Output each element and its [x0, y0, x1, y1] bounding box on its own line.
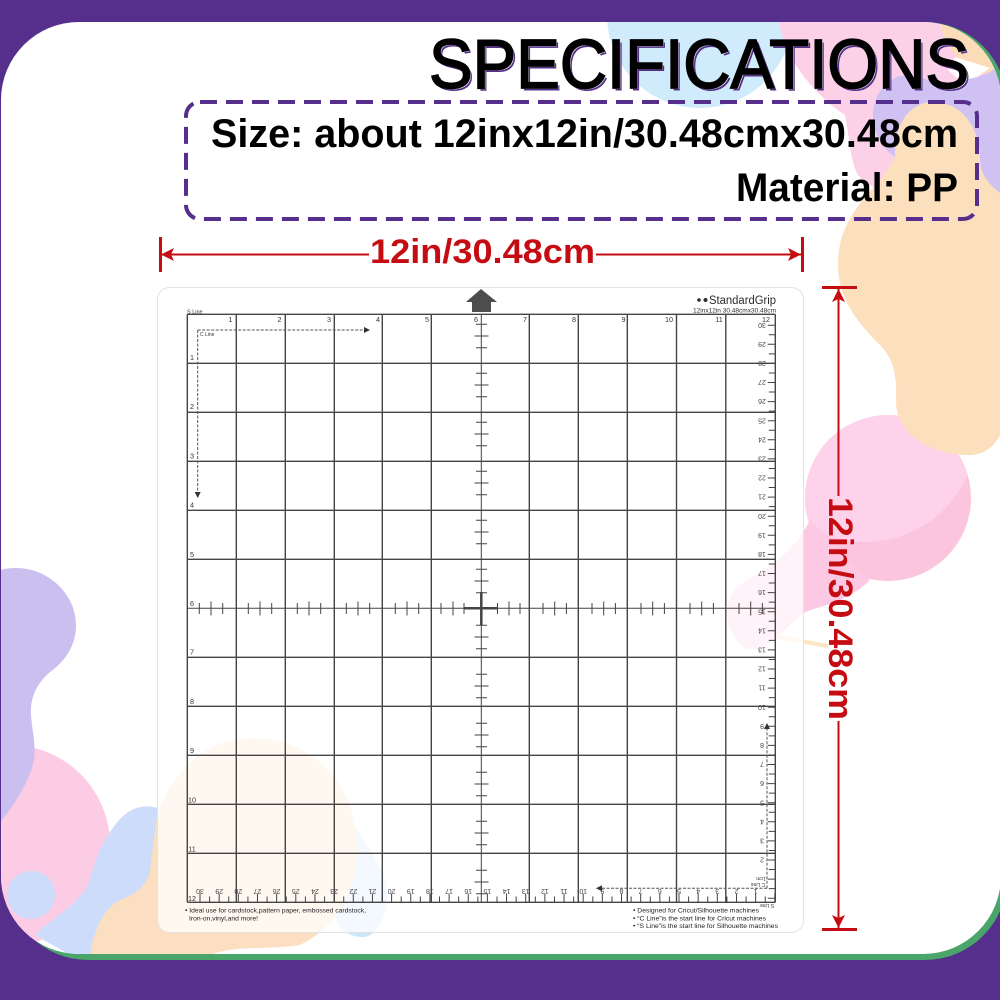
mat footnote right: [633, 908, 779, 930]
bottom centimetre numbers: 17: [445, 887, 453, 894]
top inch numbers: 6: [474, 315, 478, 324]
top inch numbers: 12: [762, 315, 770, 324]
right centimetre ruler ticks: [768, 325, 776, 902]
left inch numbers: 9: [190, 746, 194, 755]
bottom centimetre numbers: [196, 887, 758, 894]
bottom centimetre numbers: 7: [639, 887, 643, 894]
top inch numbers: 1: [228, 315, 232, 324]
mat footnote left: Iron-on,vinyl,and more!: [189, 916, 258, 922]
right centimetre numbers: 7: [760, 760, 764, 767]
bottom centimetre numbers: 8: [619, 887, 623, 894]
bottom centimetre numbers: 9: [600, 887, 604, 894]
horizontal dimension arrow: [159, 233, 804, 272]
left inch numbers: 12: [188, 894, 196, 903]
bottom centimetre numbers: 1: [754, 887, 758, 894]
left inch numbers: 4: [190, 500, 194, 510]
bottom centimetre numbers: 16: [464, 887, 472, 894]
top inch numbers: 2: [278, 315, 282, 324]
top inch numbers: [228, 315, 770, 324]
mat footnote right: • “C Line”is the start line for Cricut machines: [633, 916, 767, 922]
top inch numbers: 5: [425, 315, 429, 324]
right centimetre numbers: [758, 321, 766, 863]
right centimetre numbers: 11: [758, 684, 766, 691]
right centimetre numbers: 14: [758, 626, 766, 633]
top inch numbers: 11: [715, 315, 723, 324]
mat grid: [187, 314, 775, 902]
bottom centimetre numbers: 20: [388, 887, 395, 894]
size text: Size: about 12inx12in/30.48cmx30.48cm: [211, 112, 958, 156]
bottom centimetre numbers: 28: [234, 887, 242, 894]
right centimetre numbers: 24: [758, 435, 766, 442]
right centimetre numbers: 26: [758, 397, 766, 404]
centre cross and axis ticks: [199, 324, 762, 894]
right centimetre numbers: 6: [760, 779, 764, 786]
right centimetre numbers: 20: [758, 512, 766, 519]
top inch numbers: 10: [665, 315, 673, 324]
bottom centimetre numbers: 6: [658, 887, 662, 894]
left inch numbers: 7: [190, 648, 194, 656]
left inch numbers: 2: [190, 402, 194, 411]
left inch numbers: 11: [188, 844, 196, 854]
mat footnote right: • Designed for Cricut/Silhouette machines: [633, 908, 760, 914]
mat brand label: 12inx12in 30.48cmx30.48cm: [693, 308, 776, 314]
bottom centimetre numbers: 12: [541, 887, 549, 894]
right centimetre numbers: 22: [758, 474, 766, 481]
right centimetre numbers: 5: [760, 798, 764, 805]
bottom centimetre numbers: 19: [407, 887, 415, 894]
right centimetre numbers: 10: [758, 703, 766, 710]
bottom centimetre numbers: 4: [696, 887, 700, 894]
vertical dimension arrow: 12in/30.48cm: [821, 497, 859, 720]
right centimetre numbers: 21: [758, 493, 766, 500]
bottom centimetre numbers: 13: [522, 887, 530, 894]
left inch numbers: 3: [190, 452, 194, 460]
right centimetre numbers: 28: [758, 359, 766, 366]
bottom centimetre numbers: 23: [330, 887, 338, 894]
right centimetre numbers: 4: [760, 817, 764, 824]
bottom centimetre numbers: 29: [215, 887, 223, 894]
bottom centimetre numbers: 11: [560, 887, 568, 894]
bottom centimetre numbers: 15: [483, 887, 491, 894]
right centimetre numbers: 27: [758, 378, 766, 385]
mat brand label: [693, 295, 776, 314]
right centimetre numbers: 9: [760, 722, 764, 729]
bottom centimetre numbers: 27: [254, 887, 261, 894]
mat footnote left: • Ideal use for cardstock,pattern paper, embossed cardstock,: [185, 908, 366, 914]
mat brand label: StandardGrip: [709, 295, 776, 307]
top inch numbers: 4: [376, 315, 380, 324]
right centimetre numbers: 23: [758, 454, 766, 462]
cutting mat card: [158, 288, 804, 932]
bottom centimetre numbers: 21: [368, 887, 376, 894]
mat footnote left: [185, 908, 366, 922]
top inch numbers: 9: [622, 315, 626, 324]
title: SPECIFICATIONS: [429, 25, 969, 103]
bottom centimetre numbers: 2: [734, 887, 738, 894]
bottom centimetre numbers: 10: [579, 887, 587, 894]
bottom centimetre numbers: 24: [311, 887, 319, 894]
left inch numbers: 8: [190, 697, 194, 706]
bottom centimetre numbers: 25: [292, 887, 300, 894]
top inch numbers: 7: [523, 315, 527, 324]
right centimetre numbers: 17: [758, 569, 766, 576]
right centimetre numbers: 30: [758, 321, 766, 328]
right centimetre numbers: 8: [760, 741, 764, 748]
horizontal dimension arrow: 12in/30.48cm: [370, 233, 595, 271]
bottom centimetre numbers: 3: [715, 887, 719, 894]
mat direction arrow: [466, 289, 497, 312]
material text: Material: PP: [736, 166, 958, 210]
right centimetre numbers: 19: [758, 531, 766, 538]
bottom centimetre numbers: 22: [349, 887, 357, 894]
bottom centimetre numbers: 14: [503, 887, 510, 894]
right centimetre numbers: 25: [758, 416, 766, 423]
left inch numbers: 10: [188, 796, 196, 804]
dashed specification box: [186, 102, 977, 219]
left inch numbers: 6: [190, 599, 194, 608]
left inch numbers: 5: [190, 550, 194, 559]
bottom centimetre ruler ticks: [200, 898, 775, 900]
right centimetre numbers: 3: [760, 836, 764, 844]
top inch numbers: 8: [572, 315, 576, 324]
bottom centimetre numbers: 30: [196, 887, 204, 894]
C Line and S Line start markers, bottom right: 1cm: [756, 875, 766, 881]
right centimetre numbers: 2: [760, 856, 764, 863]
vertical dimension arrow: [821, 286, 859, 931]
C Line and S Line start markers, top left: C Line: [200, 332, 215, 338]
top inch numbers: 3: [327, 315, 331, 324]
right centimetre numbers: 12: [758, 665, 766, 672]
right centimetre numbers: 16: [758, 588, 766, 595]
right centimetre numbers: 15: [758, 607, 766, 614]
left inch numbers: 1: [190, 353, 194, 362]
right centimetre numbers: 18: [758, 550, 766, 557]
right centimetre numbers: 29: [758, 340, 766, 347]
C Line and S Line start markers, bottom right: C Line: [751, 881, 765, 887]
C Line and S Line start markers, bottom right: S Line: [760, 902, 774, 908]
right centimetre numbers: 13: [758, 646, 766, 652]
C Line and S Line start markers, bottom right: [596, 723, 774, 908]
C Line and S Line start markers, top left: S Line: [187, 309, 203, 315]
C Line and S Line start markers, top left: [187, 309, 370, 498]
mat footnote right: • “S Line”is the start line for Silhouette machines: [633, 923, 779, 930]
left inch numbers: [188, 353, 196, 903]
bottom centimetre numbers: 26: [273, 887, 280, 894]
bottom centimetre numbers: 5: [677, 887, 681, 894]
bottom centimetre numbers: 18: [426, 887, 434, 894]
